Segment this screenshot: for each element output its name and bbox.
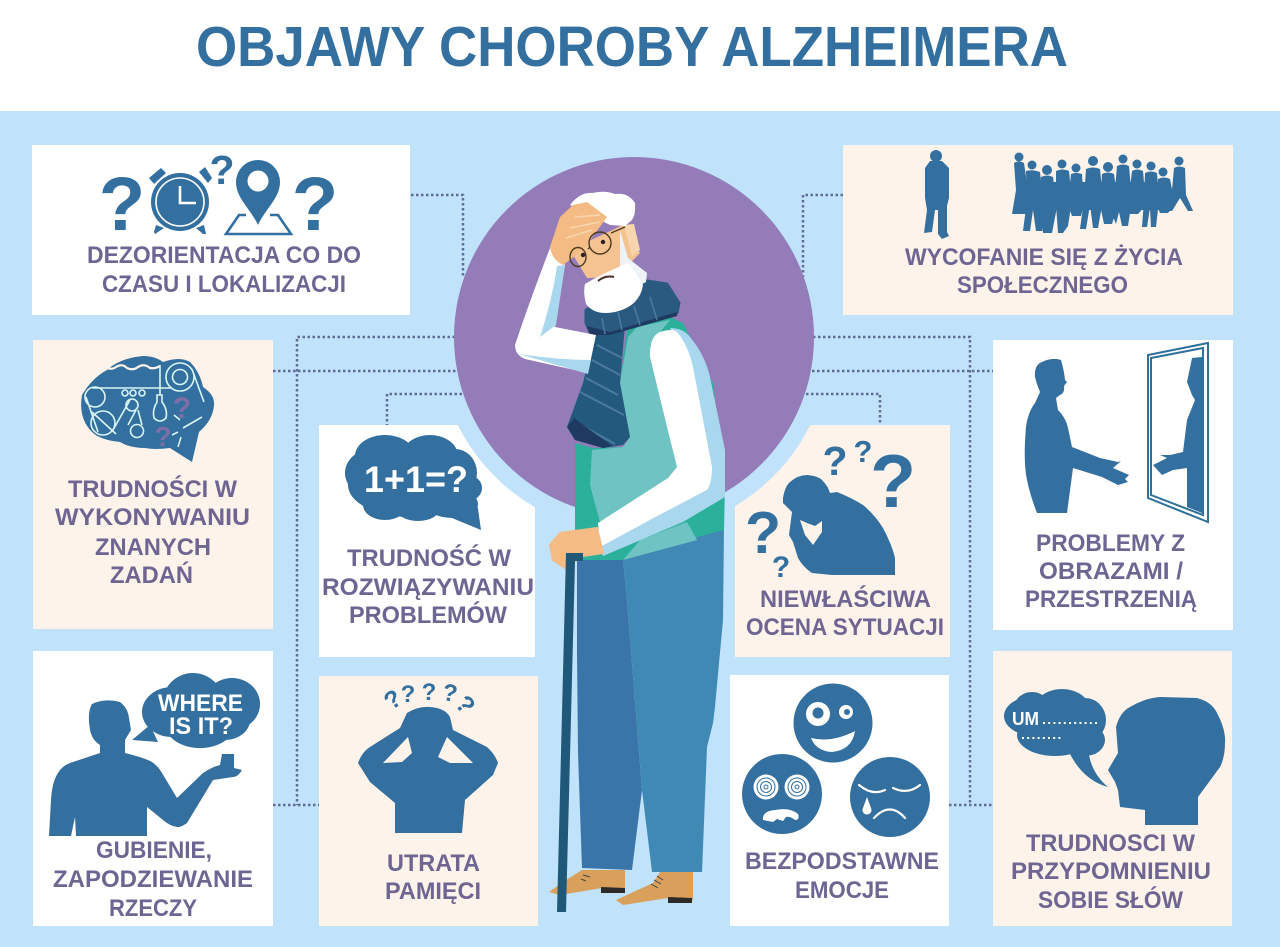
label: misplacing things: RZECZY — [109, 895, 197, 922]
label: social withdrawal: SPOŁECZNEGO — [957, 272, 1128, 299]
shoes — [549, 870, 693, 905]
label: problem solving: PROBLEMÓW — [349, 601, 508, 629]
icon: head with speech bubble — [1004, 689, 1225, 825]
icon: bent man with question marks: ? — [745, 500, 781, 566]
head — [550, 192, 647, 313]
icon: man with speech bubble: IS IT? — [169, 713, 233, 740]
figure: elderly man with cane — [515, 192, 725, 912]
trousers — [577, 526, 724, 872]
icon: man holding head: ? — [379, 684, 407, 716]
label: unfounded emotions: BEZPODSTAWNE — [745, 848, 939, 875]
icon: clock, pin and question marks — [99, 147, 338, 247]
panel: familiar tasks — [33, 340, 273, 629]
label: images and space: OBRAZAMI / — [1039, 558, 1183, 585]
icon: bent man with question marks — [745, 434, 916, 584]
left hand on cane — [550, 528, 603, 568]
icon: clock, pin and question marks: ? — [99, 162, 145, 247]
scarf — [567, 281, 679, 448]
icon: man with speech bubble: WHERE — [158, 690, 243, 717]
label: poor judgement: NIEWŁAŚCIWA — [760, 585, 931, 613]
label: familiar tasks: ZADAŃ — [110, 561, 193, 589]
panel: disorientation — [32, 145, 410, 315]
cane — [557, 553, 583, 912]
icon: man shaking hands with mirror — [1025, 343, 1208, 522]
panel: problem solving — [319, 425, 535, 657]
icon: man holding head: ? — [440, 679, 459, 708]
title: OBJAWY CHOROBY ALZHEIMERA — [196, 15, 1068, 79]
panel: poor judgement — [735, 425, 950, 657]
label: images and space: PROBLEMY Z — [1036, 530, 1185, 557]
right sleeve — [598, 328, 725, 556]
label: problem solving: TRUDNOŚĆ W — [347, 544, 512, 572]
panel: memory loss — [319, 676, 538, 926]
label: familiar tasks: ZNANYCH — [95, 534, 211, 561]
icon: bent man with question marks: ? — [772, 551, 790, 584]
icon: 1+1 thought cloud — [345, 435, 482, 530]
icon: lone man — [924, 150, 949, 239]
icon: head with speech bubble: UM — [1012, 709, 1039, 729]
icon: brain with machinery: ? — [173, 392, 191, 425]
label: familiar tasks: WYKONYWANIU — [55, 504, 250, 531]
panel: misplacing things — [33, 651, 273, 926]
panel: images and space — [993, 340, 1233, 630]
panel: unfounded emotions — [730, 675, 949, 926]
icon: brain with machinery: ? — [154, 421, 172, 452]
panel: word finding — [993, 651, 1232, 926]
raised arm — [515, 248, 596, 374]
label: memory loss: PAMIĘCI — [385, 878, 481, 905]
icon: clock, pin and question marks: ? — [292, 162, 338, 247]
purple circle — [454, 157, 814, 517]
panel: social withdrawal — [843, 145, 1233, 315]
halo around circle — [437, 140, 831, 534]
icon: man holding head: ? — [401, 681, 415, 708]
icon: man holding head: ? — [422, 679, 436, 706]
icon: 1+1 thought cloud: 1+1=? — [364, 459, 468, 500]
label: word finding: PRZYPOMNIENIU — [1011, 858, 1211, 885]
label: misplacing things: GUBIENIE, — [96, 837, 212, 864]
icon: emotion faces — [742, 684, 930, 837]
label: disorientation: CZASU I LOKALIZACJI — [102, 271, 346, 298]
label: unfounded emotions: EMOCJE — [795, 877, 889, 904]
vest — [575, 317, 725, 560]
label: disorientation: DEZORIENTACJA CO DO — [87, 242, 361, 269]
label: word finding: TRUDNOSCI W — [1026, 830, 1196, 857]
icon: clock, pin and question marks: ? — [209, 147, 235, 193]
label: memory loss: UTRATA — [387, 850, 480, 877]
icon: brain with machinery — [81, 356, 214, 462]
label: familiar tasks: TRUDNOŚCI W — [68, 475, 238, 503]
label: poor judgement: OCENA SYTUACJI — [746, 614, 944, 641]
label: word finding: SOBIE SŁÓW — [1038, 886, 1184, 914]
icon: crowd — [1012, 152, 1193, 233]
icon: man holding head: ? — [449, 690, 481, 720]
icon: man holding head — [358, 679, 498, 833]
label: images and space: PRZESTRZENIĄ — [1025, 586, 1197, 613]
label: problem solving: ROZWIĄZYWANIU — [322, 574, 534, 601]
icon: bent man with question marks: ? — [854, 434, 872, 469]
icon: bent man with question marks: ? — [822, 438, 848, 484]
dotted connectors — [273, 195, 993, 805]
label: misplacing things: ZAPODZIEWANIE — [53, 866, 253, 893]
icon: man with speech bubble — [49, 673, 260, 836]
label: social withdrawal: WYCOFANIE SIĘ Z ŻYCIA — [905, 244, 1183, 271]
icon: bent man with question marks: ? — [870, 439, 916, 523]
